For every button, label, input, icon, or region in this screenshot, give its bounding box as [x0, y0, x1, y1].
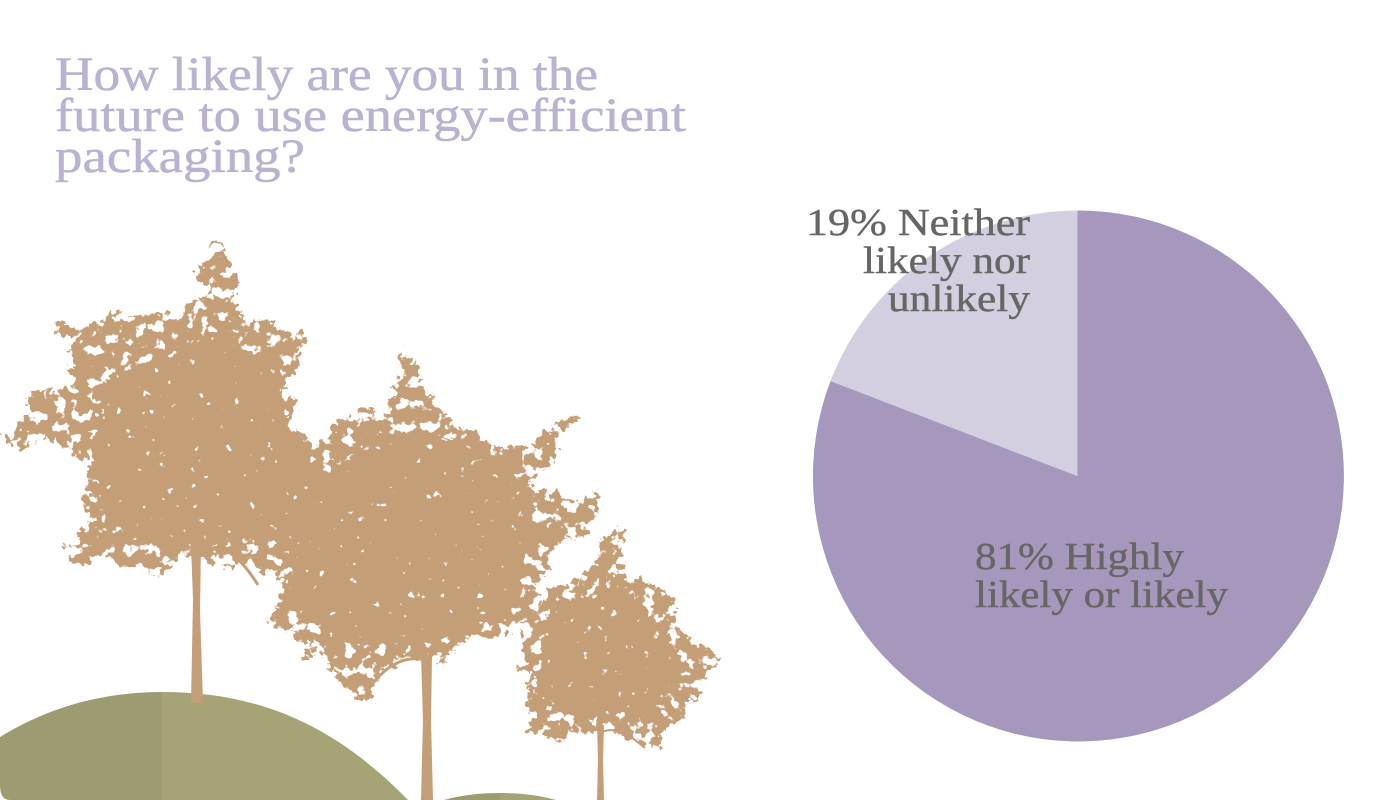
- tree: right: [515, 530, 720, 800]
- title: [55, 48, 687, 183]
- pie slice: 81%: [813, 210, 1344, 741]
- tree: middle: [258, 348, 600, 800]
- label: 19% neither: [806, 202, 1030, 320]
- label: 81% highly: likely or likely: [975, 574, 1228, 616]
- pie slice: 19%: [830, 210, 1078, 476]
- label: 19% neither: likely nor: [863, 240, 1030, 282]
- label: 19% neither: unlikely: [888, 278, 1030, 320]
- label: 81% highly: [975, 536, 1228, 616]
- label: 81% highly: 81% Highly: [975, 536, 1184, 578]
- hill: small: [444, 793, 556, 800]
- label: 19% neither: 19% Neither: [806, 202, 1030, 244]
- hill: large: [0, 692, 408, 800]
- pie chart: [813, 210, 1344, 741]
- title: packaging?: [55, 130, 305, 183]
- title: future to use energy-efficient: [55, 89, 687, 142]
- title: How likely are you in the: [55, 48, 598, 101]
- tree: left: [0, 240, 330, 703]
